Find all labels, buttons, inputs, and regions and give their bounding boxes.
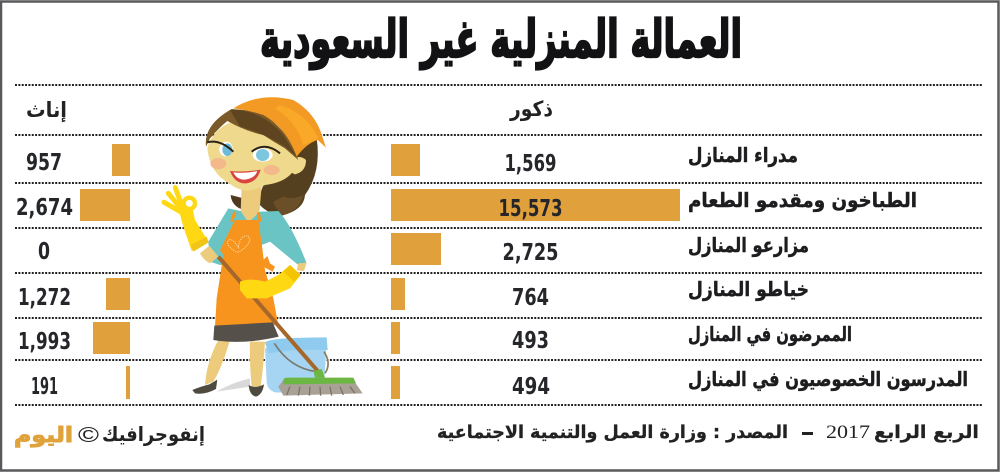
source footnote: الربع الرابع	[874, 422, 979, 443]
row: home tailors: 1,272	[18, 285, 71, 311]
illustration: smiling cleaner with mop and bucket	[164, 97, 363, 397]
row: home farmers	[38, 233, 809, 266]
row: house managers	[26, 143, 798, 177]
column header: males: ذكور	[509, 97, 553, 121]
row: home nurses: 1,993	[18, 329, 71, 355]
row: house managers: 957	[26, 150, 62, 176]
row: house managers: مدراء المنازل	[688, 143, 798, 167]
row: home tutors	[31, 366, 968, 400]
row: home nurses	[18, 322, 852, 355]
column header: females: إناث	[26, 98, 67, 122]
credit: infographic logo: إنفوجرافيك	[102, 422, 205, 446]
row: cooks and food servers: 2,674	[16, 195, 73, 221]
row: home farmers: مزارعو المنازل	[688, 233, 809, 257]
credit: infographic logo: اليوم	[14, 423, 73, 447]
row: home tailors	[18, 277, 809, 311]
credit: infographic logo	[14, 422, 205, 447]
row: home tutors: 494	[512, 374, 550, 400]
source footnote: 2017	[826, 422, 870, 443]
row: home nurses: الممرضون في المنازل	[688, 322, 852, 347]
row: cooks and food servers: 15,573	[498, 196, 562, 222]
source footnote	[437, 422, 979, 443]
row: home nurses: 493	[512, 328, 549, 354]
row: home tailors: خياطو المنازل	[688, 277, 809, 301]
row: home tailors: 764	[512, 285, 549, 311]
row: cooks and food servers: الطباخون ومقدمو الطعام	[688, 188, 917, 212]
row: home farmers: 2,725	[502, 240, 558, 266]
row: home tutors: 191	[31, 374, 58, 400]
title: العمالة المنزلية غير السعودية	[260, 10, 742, 70]
credit: infographic logo: ©	[78, 424, 100, 447]
row: cooks and food servers	[16, 188, 917, 222]
row: home farmers: 0	[38, 239, 50, 265]
source footnote: المصدر : وزارة العمل والتنمية الاجتماعية	[437, 422, 788, 443]
row: house managers: 1,569	[504, 151, 556, 177]
